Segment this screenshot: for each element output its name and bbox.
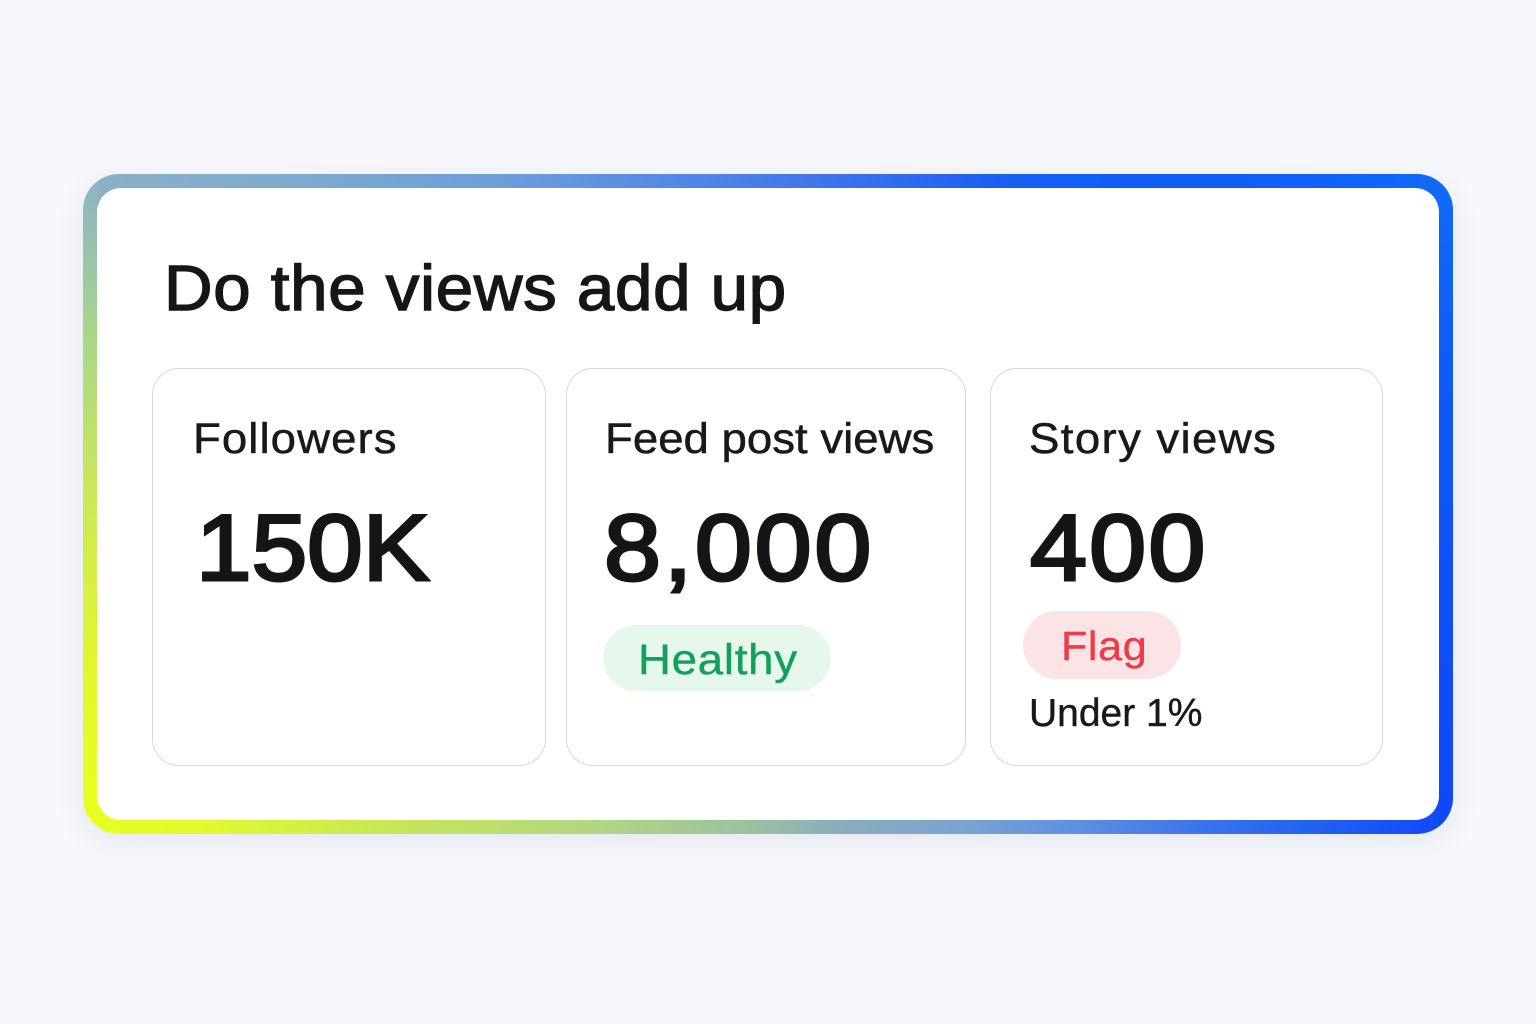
story views number: 400 [1030,495,1207,600]
story views label: Story views [1029,415,1277,463]
panel: feed post views card [566,368,966,766]
healthy badge: Healthy [638,636,798,684]
feed post views label: Feed post views [605,415,934,463]
panel: story views card [990,368,1383,766]
under 1% note: Under 1% [1029,692,1202,735]
panel: followers card [152,368,546,766]
flag badge [1023,611,1181,679]
feed post views number: 8,000 [604,495,874,600]
followers number: 150K [196,495,429,600]
panel: gradient border frame [83,174,1453,834]
title: Do the views add up [164,252,787,324]
followers label: Followers [193,415,398,463]
flag badge: Flag [1061,623,1147,669]
healthy badge [603,625,831,691]
